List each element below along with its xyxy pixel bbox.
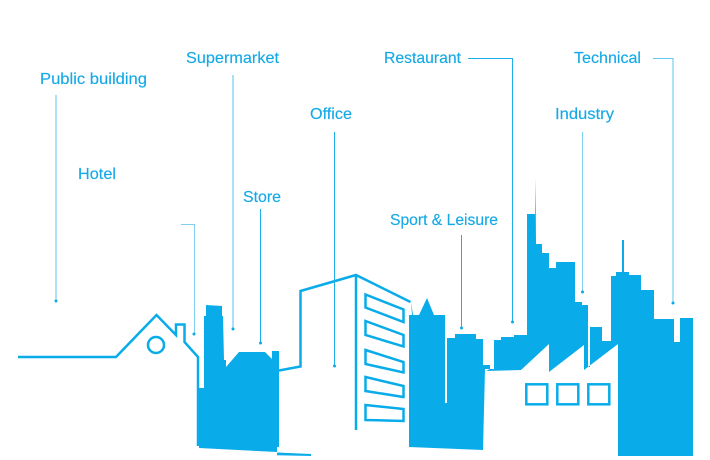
label: Restaurant: Restaurant: [384, 50, 462, 67]
label: Hotel: Hotel: [78, 166, 116, 183]
office building outline: [279, 275, 410, 430]
office windows: [366, 294, 404, 421]
label: Office: [310, 106, 352, 368]
house outline with chimney: [18, 315, 198, 446]
label: Sport and Leisure: [390, 212, 498, 330]
tower and sport and leisure building: [409, 298, 490, 450]
dark buildings: hotel, supermarket and store block: [199, 305, 279, 452]
ground stroke under store: [277, 452, 311, 456]
label: Industry: Industry: [555, 106, 614, 123]
label: Public building: Public building: [40, 71, 147, 88]
label: Technical: [574, 50, 674, 304]
factory windows: [526, 384, 609, 404]
factory backdrop skyline: restaurant and industry towers: [486, 178, 693, 456]
label: Restaurant: [384, 50, 514, 324]
label: Technical: Technical: [574, 50, 641, 67]
label: Store: Store: [243, 189, 281, 206]
icon: round house window: [148, 337, 164, 353]
label: Store: [243, 189, 281, 344]
label: Supermarket: [186, 50, 280, 330]
label: Supermarket: Supermarket: [186, 50, 280, 67]
label: Public building: [40, 71, 147, 302]
label: Industry: [555, 106, 614, 294]
label: Hotel: [78, 166, 196, 336]
label: Sport and Leisure: Sport & Leisure: [390, 212, 498, 229]
label: Office: Office: [310, 106, 352, 123]
